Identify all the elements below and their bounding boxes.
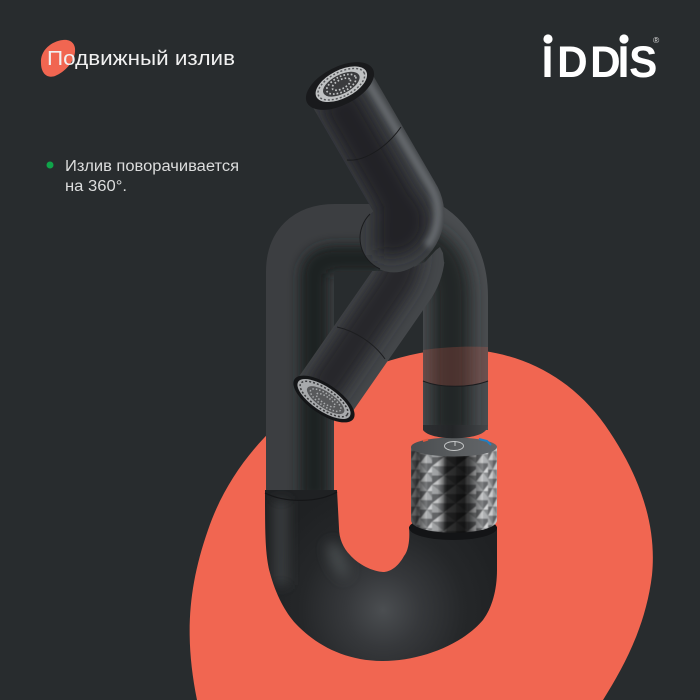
bullet point bbox=[46, 158, 239, 195]
cold mark bbox=[479, 439, 491, 445]
spout seam bbox=[337, 327, 385, 359]
upper spout with bend bbox=[314, 77, 444, 272]
tube bottom end bbox=[423, 425, 488, 438]
bullet text: Излив поворачивается bbox=[65, 158, 239, 175]
bullet text: на 360°. bbox=[65, 178, 127, 195]
bullet marker bbox=[46, 162, 54, 168]
cylinder top bbox=[411, 438, 497, 456]
rim highlight bbox=[364, 76, 438, 246]
U-shaped lower body bbox=[260, 485, 505, 665]
title: Подвижный излив bbox=[47, 48, 235, 70]
faucet bbox=[264, 62, 497, 661]
body seam bbox=[265, 492, 337, 500]
spout seam bbox=[347, 127, 401, 160]
left tube and arch bbox=[266, 204, 374, 490]
coral reflection on tube bbox=[423, 347, 488, 386]
dark ring below cylinder bbox=[409, 516, 497, 540]
lower aerator bbox=[286, 367, 362, 431]
coral blob background shape bbox=[190, 349, 653, 700]
logo: IDDIS bbox=[542, 38, 657, 87]
title marker blob bbox=[41, 40, 75, 77]
logo: ® bbox=[653, 35, 660, 45]
knot seam bbox=[360, 214, 380, 269]
diamond textured control cylinder bbox=[411, 425, 497, 532]
power icon bbox=[444, 441, 464, 450]
upper aerator bbox=[298, 52, 382, 120]
lower spout bbox=[293, 247, 444, 422]
rear vertical tube bbox=[414, 207, 488, 430]
warm mark bbox=[423, 440, 428, 441]
